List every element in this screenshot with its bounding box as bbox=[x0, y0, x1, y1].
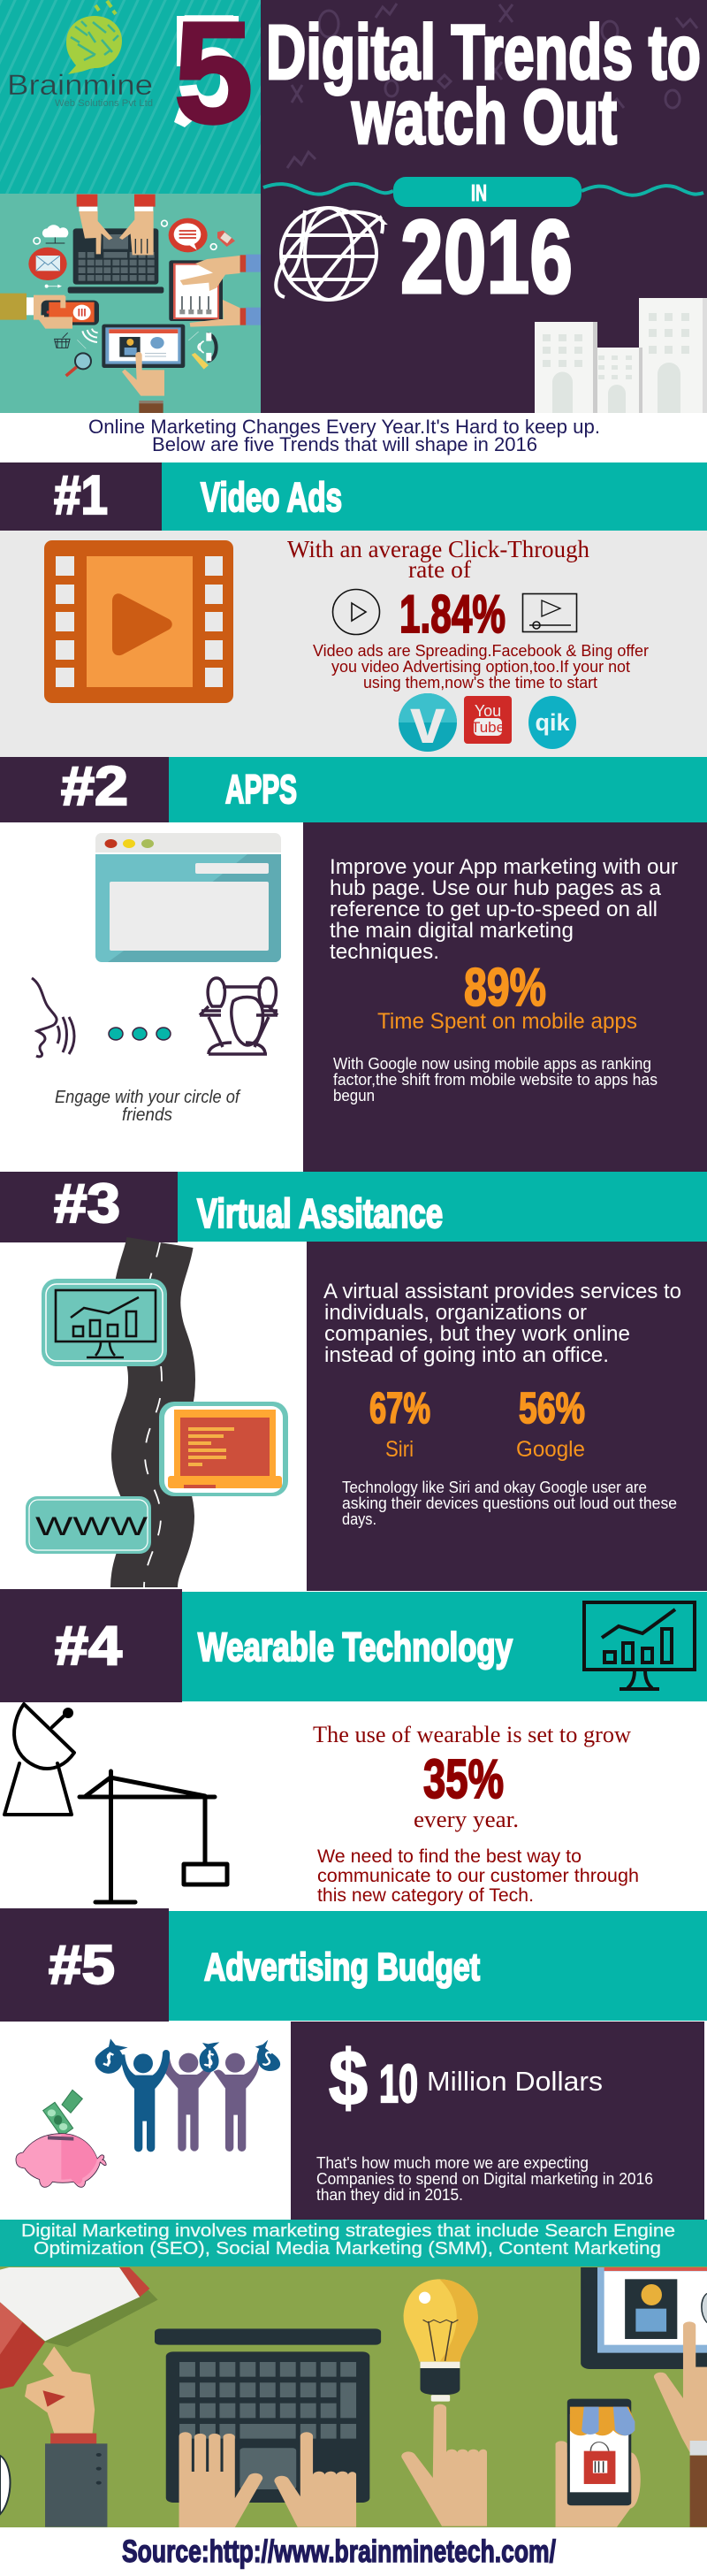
piggy bank bbox=[16, 2134, 106, 2187]
stat: 1.84%: 1.84% bbox=[399, 585, 506, 644]
light bulb bbox=[404, 2279, 478, 2402]
panel: wearable illustration bbox=[4, 1704, 227, 1902]
dots bbox=[109, 1028, 171, 1040]
stat: siri: Siri bbox=[385, 1437, 414, 1462]
stat: google: 56% bbox=[519, 1385, 585, 1433]
brand logo: Brainmine bbox=[7, 69, 153, 101]
icon: youtube: Tube bbox=[471, 719, 505, 736]
phone in hand bbox=[556, 2399, 641, 2527]
section 4 header: #4 bbox=[55, 1616, 123, 1677]
digital marketing banner: Optimization (SEO), Social Media Marketing (SMM), Content Marketing bbox=[34, 2239, 661, 2259]
click-through heading: rate of bbox=[408, 556, 471, 583]
assistant paragraph: instead of going into an office. bbox=[324, 1343, 609, 1367]
siri note bbox=[342, 1479, 677, 1528]
budget paragraph: That's how much more we are expecting bbox=[316, 2154, 589, 2172]
wearable text bbox=[313, 1722, 639, 1906]
stat label: Time Spent on mobile apps bbox=[377, 1009, 637, 1034]
left teal panel bbox=[0, 0, 261, 194]
siri note: asking their devices questions out loud out these bbox=[342, 1494, 677, 1512]
pointing hand bbox=[122, 352, 164, 396]
siri note: Technology like Siri and okay Google user are bbox=[342, 1479, 647, 1496]
icon: globe bbox=[276, 208, 384, 300]
section 5 header: #5 bbox=[49, 1935, 115, 1996]
panel: virtual assistance text bbox=[307, 1242, 707, 1591]
panel: road illustration bbox=[26, 1242, 288, 1587]
right hand bbox=[654, 2321, 707, 2452]
icon: vimeo bbox=[399, 686, 457, 757]
cash bbox=[43, 2090, 82, 2136]
panel: apps text bbox=[303, 822, 707, 1172]
every year: every year. bbox=[414, 1807, 519, 1832]
icon: youtube: You bbox=[475, 702, 501, 720]
top hands bbox=[79, 210, 112, 254]
stat: siri: 67% bbox=[369, 1385, 430, 1433]
wave and IN pill: IN bbox=[471, 180, 487, 206]
icon: vimeo: v bbox=[410, 686, 445, 757]
section 2 header: APPS bbox=[225, 767, 297, 812]
digital marketing banner: Digital Marketing involves marketing strategies that include Search Engine bbox=[21, 2221, 675, 2241]
intro text: Online Marketing Changes Every Year.It's Hard to keep up. bbox=[88, 416, 600, 438]
icon: film strip bbox=[44, 540, 233, 703]
section 3 header: #3 bbox=[54, 1173, 120, 1234]
section 1 header: #1 bbox=[54, 465, 108, 526]
card: laptop bbox=[159, 1402, 288, 1496]
apps paragraph: Improve your App marketing with our bbox=[330, 855, 678, 879]
video ads text: using them,now's the time to start bbox=[363, 674, 597, 692]
panel: budget illustration bbox=[16, 2038, 280, 2187]
intro text bbox=[88, 416, 600, 455]
section 5 header: Advertising Budget bbox=[204, 1945, 480, 1989]
section 2 header: #2 bbox=[61, 756, 128, 817]
icon: browser window bbox=[95, 833, 281, 962]
megaphone bbox=[0, 2267, 158, 2389]
laptop bbox=[73, 228, 158, 285]
laptop bbox=[155, 2328, 381, 2503]
icon: youtube bbox=[464, 696, 512, 744]
panel: apps illustration bbox=[0, 822, 303, 1172]
section 2 header bbox=[0, 756, 707, 822]
wave and IN pill bbox=[263, 177, 703, 207]
icon: satellite dish bbox=[4, 1704, 74, 1815]
brand logo: Web Solutions Pvt Ltd bbox=[55, 98, 153, 109]
basket bbox=[55, 339, 70, 348]
apps paragraph: hub page. Use our hub pages as a bbox=[330, 876, 662, 900]
icon: qik: qik bbox=[535, 709, 570, 736]
mail icon bbox=[28, 248, 67, 280]
budget paragraph: Companies to spend on Digital marketing in 2016 bbox=[316, 2170, 653, 2188]
assistant paragraph: individuals, organizations or bbox=[324, 1301, 587, 1325]
caption: engage bbox=[55, 1088, 241, 1125]
caption: engage: friends bbox=[122, 1105, 172, 1125]
cloud bbox=[42, 225, 68, 237]
card: www bbox=[26, 1496, 151, 1554]
magnifier bbox=[75, 353, 91, 369]
video ads text bbox=[313, 642, 649, 692]
wearable paragraph bbox=[317, 1846, 639, 1906]
budget paragraph bbox=[316, 2154, 653, 2204]
screen bbox=[102, 325, 185, 368]
assistant paragraph bbox=[323, 1280, 681, 1367]
icon: speaking face bbox=[32, 978, 74, 1057]
people with money bags bbox=[95, 2038, 280, 2152]
typing hands bbox=[179, 2432, 356, 2527]
assistant paragraph: A virtual assistant provides services to bbox=[323, 1280, 681, 1303]
intro text: Below are five Trends that will shape in 2016 bbox=[152, 433, 537, 455]
caption: engage: Engage with your circle of bbox=[55, 1088, 241, 1107]
wearable heading: The use of wearable is set to grow bbox=[313, 1722, 631, 1747]
illustration: devices and hands bbox=[0, 194, 261, 413]
left hand and suit bbox=[0, 2346, 107, 2527]
stat: 10 million dollars: $ bbox=[329, 2034, 368, 2121]
stat: 10 million dollars bbox=[329, 2034, 603, 2121]
panel: video ads bbox=[0, 531, 707, 757]
icon: crane bbox=[80, 1771, 227, 1902]
stat: 10 million dollars: 10 bbox=[379, 2054, 418, 2114]
brand logo bbox=[7, 1, 153, 109]
apps paragraph bbox=[330, 855, 678, 964]
card: chart bbox=[42, 1279, 167, 1366]
year 2016: 2016 bbox=[400, 199, 573, 316]
apps paragraph: reference to get up-to-speed on all bbox=[330, 898, 658, 921]
section 3 header bbox=[0, 1172, 707, 1242]
title bbox=[266, 10, 701, 160]
chat bubble bbox=[169, 218, 208, 252]
card: www: WWW bbox=[35, 1512, 148, 1541]
price tag bbox=[217, 231, 235, 247]
assistant paragraph: companies, but they work online bbox=[324, 1322, 630, 1346]
wearable paragraph: We need to find the best way to bbox=[317, 1846, 582, 1867]
illustration: marketing hero bbox=[0, 2266, 707, 2527]
digital marketing banner bbox=[0, 2220, 707, 2266]
click-through heading: With an average Click-Through bbox=[287, 536, 589, 562]
section 4 header: Wearable Technology bbox=[198, 1624, 513, 1670]
stat: siri bbox=[369, 1385, 430, 1462]
budget paragraph: than they did in 2015. bbox=[316, 2186, 463, 2204]
wearable paragraph: communicate to our customer through bbox=[317, 1866, 639, 1886]
video ads text: you video Advertising option,too.If your not bbox=[331, 658, 630, 676]
icon: monitor chart bbox=[584, 1602, 695, 1689]
click-through heading bbox=[287, 536, 589, 583]
stat: 10 million dollars: Million Dollars bbox=[427, 2066, 603, 2097]
road bbox=[144, 1242, 162, 1587]
section 1 header: Video Ads bbox=[201, 474, 342, 520]
section 1 header bbox=[0, 462, 707, 531]
video ads text: Video ads are Spreading.Facebook & Bing offer bbox=[313, 642, 649, 660]
source line: Source:http://www.brainminetech.com/ bbox=[122, 2534, 556, 2569]
stat: 89%: 89% bbox=[464, 958, 546, 1017]
pointing hand bbox=[401, 2404, 487, 2526]
icon: circle of friends bbox=[200, 978, 277, 1054]
icon: play circle bbox=[332, 589, 380, 635]
apps note: With Google now using mobile apps as ranking bbox=[333, 1055, 651, 1073]
apps note: begun bbox=[333, 1087, 375, 1105]
headset and pencil bbox=[208, 334, 217, 361]
apps note bbox=[333, 1055, 658, 1105]
tablet with hands bbox=[169, 260, 223, 321]
hero panel bbox=[0, 0, 707, 413]
phone with hand bbox=[0, 294, 27, 320]
icon: qik bbox=[528, 696, 576, 749]
panel: budget text bbox=[291, 2022, 704, 2220]
section 3 header: Virtual Assitance bbox=[197, 1190, 443, 1236]
wifi arcs bbox=[82, 329, 98, 342]
apps paragraph: techniques. bbox=[330, 940, 439, 964]
top right screen bbox=[581, 2267, 707, 2369]
section 4 header bbox=[0, 1589, 707, 1702]
icon: video player bbox=[523, 594, 576, 631]
siri note: days. bbox=[342, 1510, 376, 1528]
buildings bbox=[535, 298, 707, 413]
apps paragraph: the main digital marketing bbox=[330, 919, 574, 943]
stat: 35%: 35% bbox=[423, 1749, 504, 1810]
wearable paragraph: this new category of Tech. bbox=[317, 1885, 534, 1906]
stat: google: Google bbox=[516, 1437, 585, 1462]
stat: google bbox=[516, 1385, 585, 1462]
apps note: factor,the shift from mobile website to apps has bbox=[333, 1071, 658, 1089]
section 5 header bbox=[0, 1908, 707, 2022]
